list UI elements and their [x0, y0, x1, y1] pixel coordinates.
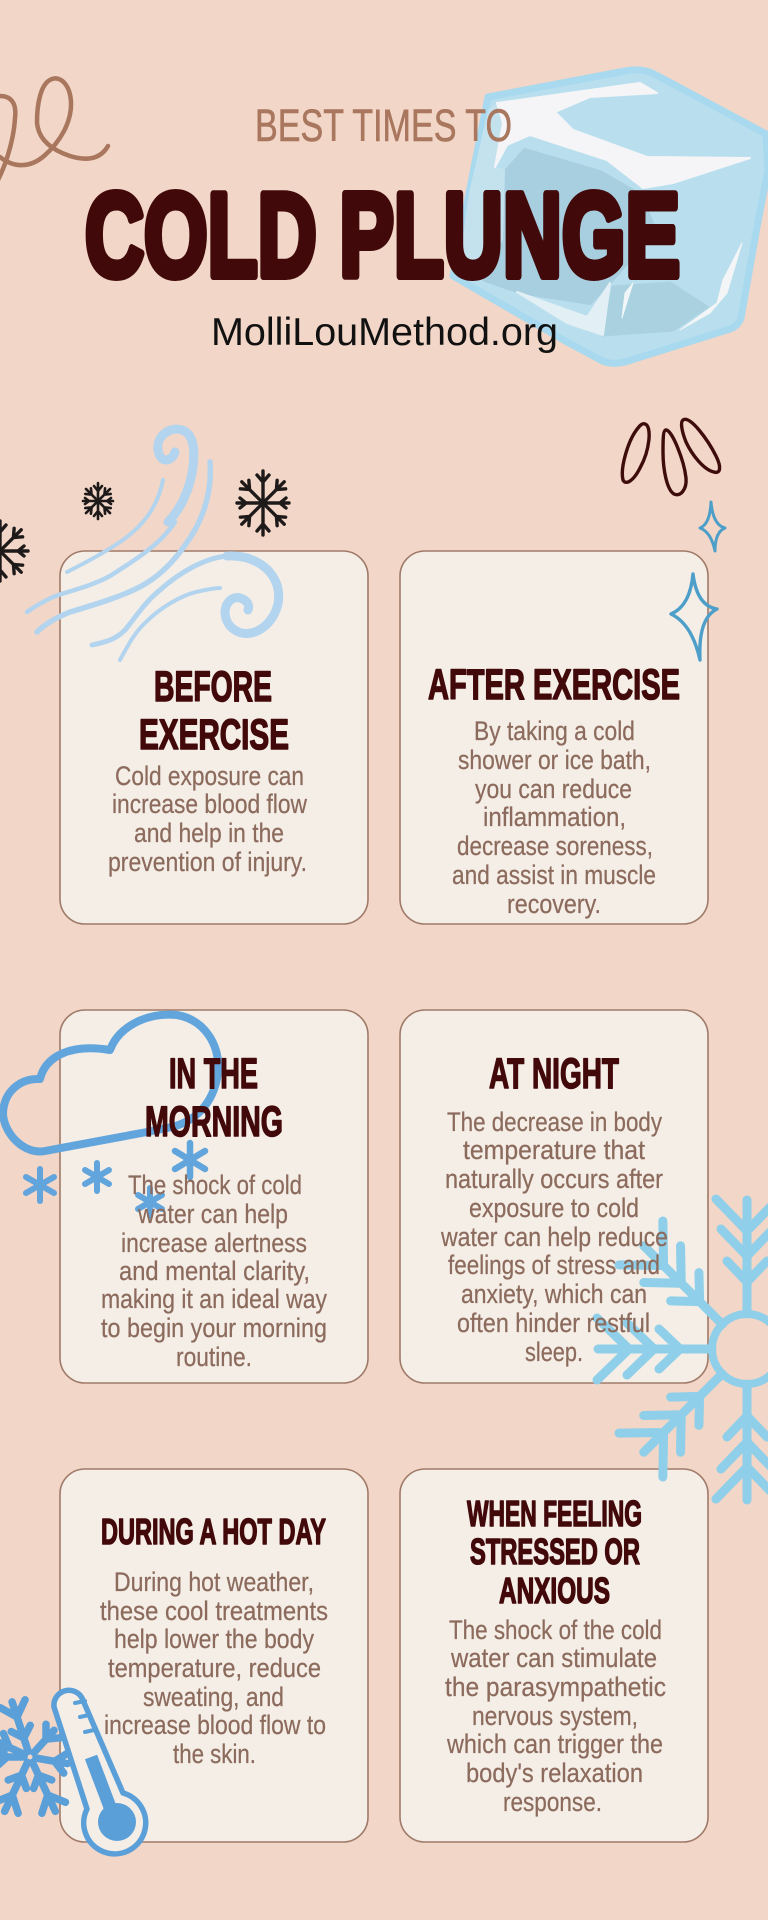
text: at night: naturally occurs after	[445, 1164, 663, 1194]
text: after exercise: and assist in muscle	[452, 860, 656, 890]
text: in the morning: MORNING	[145, 1098, 283, 1146]
text: at night: anxiety, which can	[461, 1279, 647, 1309]
text: before exercise: Cold exposure can	[115, 761, 304, 791]
text: during a hot day: these cool treatments	[100, 1596, 328, 1626]
text: at night: AT NIGHT	[489, 1050, 619, 1098]
icon: left edge black snowflake	[0, 521, 28, 581]
text: after exercise: inflammation,	[483, 802, 626, 832]
text: in the morning: increase alertness	[121, 1228, 307, 1258]
text: in the morning: The shock of cold	[128, 1170, 302, 1200]
text: at night: often hinder restful	[457, 1308, 650, 1338]
text: before exercise: BEFORE	[154, 663, 272, 711]
text: during a hot day: DURING A HOT DAY	[101, 1511, 326, 1552]
panel: at night card	[400, 1010, 708, 1383]
text: before exercise: increase blood flow	[112, 789, 308, 819]
text: after exercise: recovery.	[507, 889, 601, 919]
text: after exercise: shower or ice bath,	[458, 745, 651, 775]
text: when feeling stressed or anxious: body's relaxation	[466, 1758, 643, 1788]
text: during a hot day: the skin.	[173, 1739, 256, 1769]
text: before exercise: prevention of injury.	[108, 847, 307, 877]
text: when feeling stressed or anxious: STRESSED OR	[470, 1531, 640, 1572]
icon: small blue sparkle	[700, 502, 725, 551]
text: in the morning: routine.	[176, 1342, 252, 1372]
text: at night: water can help reduce	[440, 1222, 668, 1252]
text: in the morning: IN THE	[169, 1050, 258, 1098]
text: in the morning	[101, 1050, 328, 1372]
text: when feeling stressed or anxious: WHEN FEELING	[467, 1493, 642, 1534]
heading: best times to: BEST TIMES TO	[255, 100, 512, 151]
text: after exercise: By taking a cold	[474, 716, 635, 746]
text: when feeling stressed or anxious: the parasympathetic	[445, 1672, 666, 1702]
icon: small black snowflake	[83, 483, 113, 519]
text: website: MolliLouMethod.org	[211, 311, 558, 354]
text: before exercise: EXERCISE	[139, 711, 289, 759]
panel: after exercise card	[400, 551, 708, 924]
icon: thermometer	[54, 1690, 146, 1854]
text: during a hot day: During hot weather,	[114, 1567, 314, 1597]
text: in the morning: water can help	[137, 1199, 288, 1229]
panel: when feeling stressed card	[400, 1469, 708, 1842]
text: before exercise: and help in the	[134, 818, 284, 848]
icon: blue cloud	[3, 1015, 218, 1152]
text: when feeling stressed or anxious: which can trigger the	[446, 1729, 663, 1759]
text: in the morning: and mental clarity,	[119, 1256, 310, 1286]
text: when feeling stressed or anxious: ANXIOUS	[499, 1570, 610, 1611]
text: during a hot day: increase blood flow to	[104, 1710, 326, 1740]
icon: large blue sparkle	[671, 574, 717, 660]
text: at night	[440, 1050, 668, 1367]
text: at night: sleep.	[525, 1337, 583, 1367]
icon: large light blue snowflake	[597, 1199, 768, 1500]
text: after exercise: you can reduce	[475, 774, 632, 804]
panel: before exercise card	[60, 551, 368, 924]
text: during a hot day: sweating, and	[143, 1682, 284, 1712]
panel: during a hot day card	[60, 1469, 368, 1842]
text: after exercise	[428, 661, 680, 919]
text: during a hot day: temperature, reduce	[108, 1653, 321, 1683]
panel: in the morning card	[60, 1010, 368, 1383]
text: in the morning: making it an ideal way	[101, 1284, 328, 1314]
icon: blue snow asterisks	[26, 1143, 205, 1216]
icon: large black snowflake	[237, 471, 289, 535]
text: at night: The decrease in body	[447, 1107, 663, 1137]
icon: ice cube	[453, 70, 768, 363]
text: before exercise	[108, 663, 308, 877]
text: after exercise: decrease soreness,	[457, 831, 653, 861]
icon: three brown seed shapes	[622, 419, 720, 495]
icon: small blue snowflake	[0, 1698, 69, 1817]
text: at night: feelings of stress and	[448, 1250, 660, 1280]
text: at night: exposure to cold	[469, 1193, 639, 1223]
text: during a hot day: help lower the body	[114, 1624, 315, 1654]
text: when feeling stressed or anxious: The shock of the cold	[449, 1615, 662, 1645]
icon: wind swirls	[27, 429, 279, 660]
text: when feeling stressed or anxious: water can stimulate	[450, 1643, 657, 1673]
text: in the morning: to begin your morning	[101, 1313, 327, 1343]
text: during a hot day	[100, 1511, 328, 1769]
text: when feeling stressed or anxious: response.	[503, 1787, 602, 1817]
text: when feeling stressed or anxious	[445, 1493, 666, 1817]
icon: brown squiggle	[0, 78, 108, 180]
text: when feeling stressed or anxious: nervous system,	[472, 1701, 638, 1731]
text: at night: temperature that	[463, 1135, 646, 1165]
